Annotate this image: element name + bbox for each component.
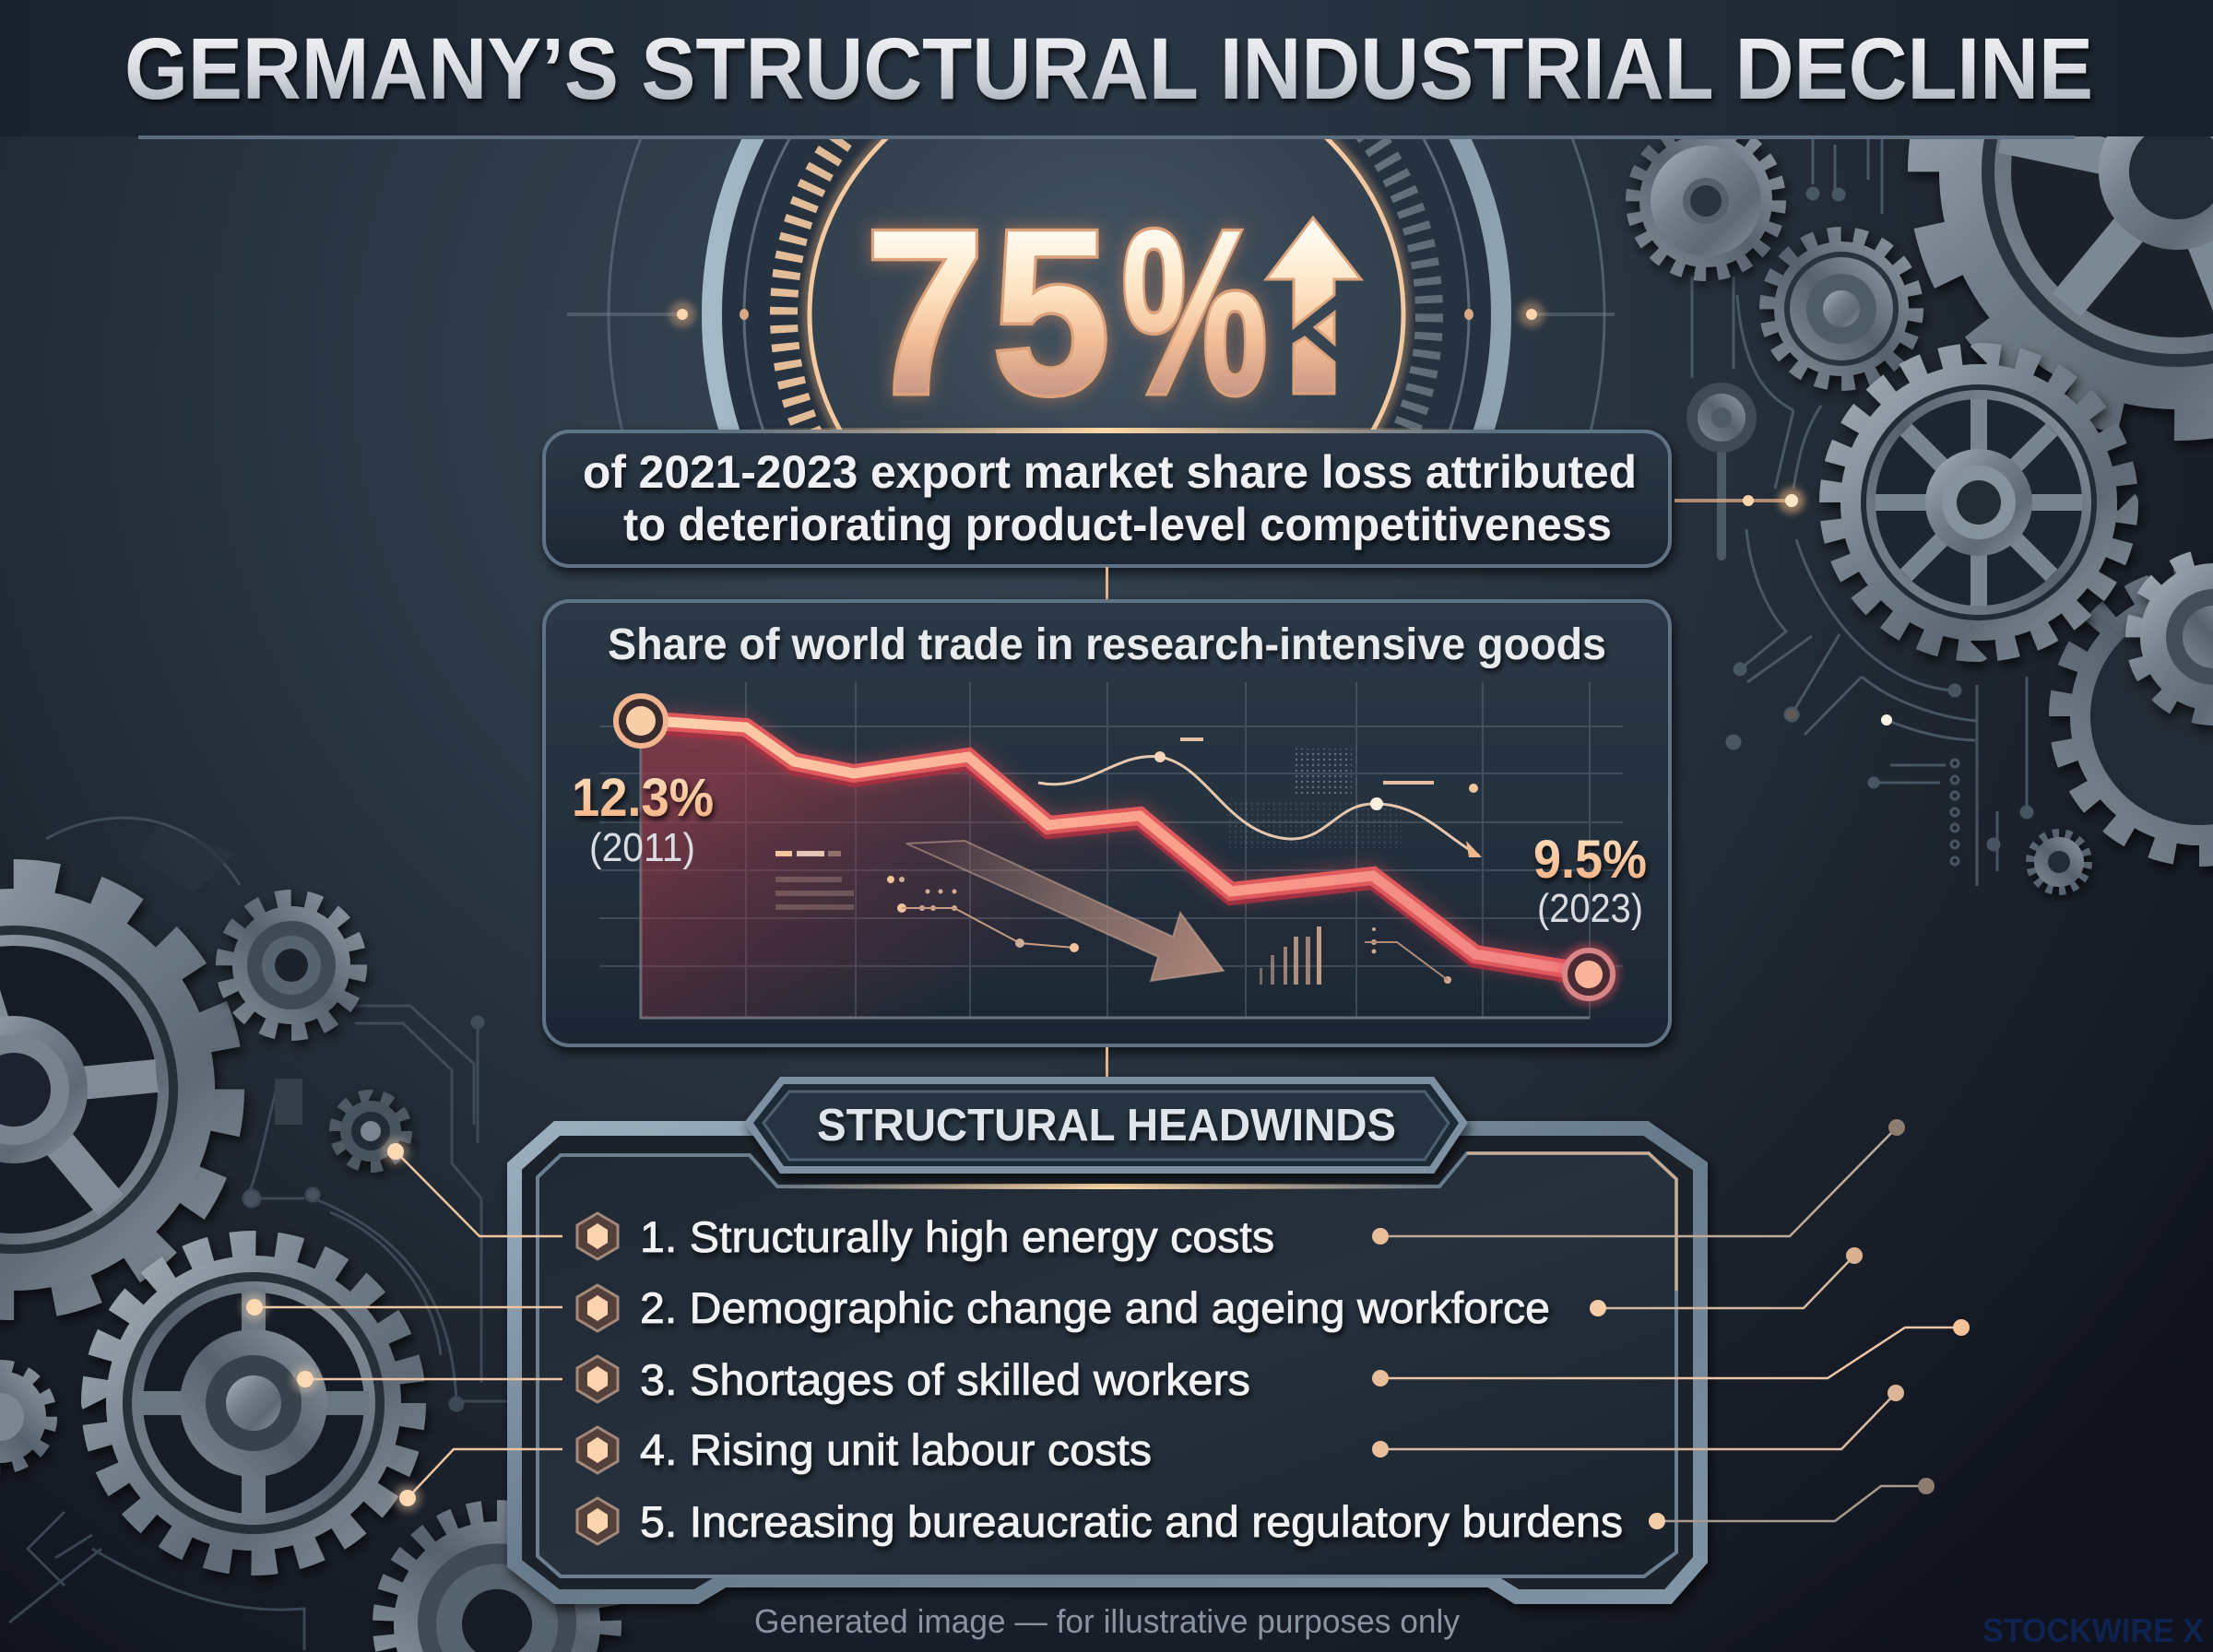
inner panel accent bbox=[1467, 1153, 1676, 1291]
panel: trade share chart bbox=[544, 601, 1670, 1045]
statistic: 75%: 7 bbox=[865, 181, 985, 442]
gear: main right bbox=[1831, 355, 2126, 650]
trend line bbox=[641, 720, 1589, 977]
connector: chart to headwinds bbox=[1106, 1047, 1108, 1080]
chart heading: Share of world trade in research-intensive goods bbox=[608, 620, 1606, 669]
item 2: 2. Demographic change and ageing workforce bbox=[640, 1283, 1550, 1332]
dial: metal ring bbox=[702, 139, 1511, 430]
label: 2023 year: (2023) bbox=[1537, 886, 1643, 931]
statistic: 75%: % bbox=[1121, 181, 1268, 442]
dial: dark ring base bbox=[722, 139, 1404, 430]
down arrow bbox=[906, 841, 1224, 981]
summary text bbox=[583, 446, 1637, 550]
gear: large top right bbox=[1926, 0, 2213, 422]
outer metal frame bbox=[515, 1128, 1700, 1597]
gear: large left bbox=[0, 876, 228, 1304]
icon: broken up arrow bbox=[1266, 218, 1361, 394]
dial: thin ring bbox=[743, 139, 1470, 430]
decoration: right circuit traces bbox=[1692, 129, 2032, 886]
statistic: 75%: 7 bbox=[865, 181, 985, 442]
dial: axis dots and lines bbox=[567, 301, 1615, 327]
panel: structural headwinds bbox=[515, 1080, 1700, 1597]
watermark: STOCKWIRE X bbox=[1982, 1611, 2204, 1649]
marker: 2023 bbox=[1557, 943, 1620, 1006]
gear: upper small right bbox=[1634, 129, 1778, 273]
statistic: 75%: 5 bbox=[992, 181, 1110, 442]
statistic: 75% bbox=[865, 181, 1268, 442]
gear: front right bbox=[2134, 557, 2213, 717]
chart grid bbox=[599, 682, 1623, 1018]
gear: tiny node right bbox=[1686, 383, 1757, 560]
gear: small upper left bbox=[225, 899, 358, 1032]
label: 2011 year: (2011) bbox=[589, 825, 695, 870]
label: 2011 value: 12.3% bbox=[572, 768, 714, 828]
glow: right connector bbox=[1675, 488, 1892, 726]
gear: middle small right bbox=[1768, 235, 1915, 383]
item 3: 3. Shortages of skilled workers bbox=[640, 1355, 1250, 1404]
label: 2023 value: 9.5% bbox=[1533, 830, 1647, 890]
dial: tick marks bbox=[770, 139, 1443, 430]
gear: tiny lower right bbox=[2030, 833, 2088, 891]
gear: bottom bbox=[385, 1512, 609, 1652]
item 5: 5. Increasing bureaucratic and regulatory burdens bbox=[640, 1497, 1623, 1546]
heading plate: STRUCTURAL HEADWINDS bbox=[817, 1101, 1396, 1150]
chart panel box bbox=[544, 601, 1670, 1045]
mini chart: curve bbox=[1038, 739, 1482, 857]
panel glow bbox=[777, 1184, 1439, 1189]
item 1: 1. Structurally high energy costs bbox=[640, 1212, 1274, 1261]
area below line bbox=[641, 720, 1589, 1018]
summary text: of 2021-2023 export market share loss attributed bbox=[583, 446, 1637, 498]
title band bbox=[0, 0, 2213, 139]
decoration: left circuit traces bbox=[9, 818, 516, 1650]
connector: summary to chart bbox=[1106, 567, 1108, 600]
dial: glow bbox=[799, 139, 1414, 430]
central dial bbox=[607, 139, 1606, 430]
connector lines: right side bbox=[1372, 1119, 1970, 1529]
chart axis bbox=[641, 747, 1590, 1018]
gear: large lower left bbox=[95, 1245, 412, 1562]
top glow bbox=[738, 428, 1475, 433]
footnote: Generated image — for illustrative purposes only bbox=[754, 1602, 1460, 1640]
connector lines: left side bbox=[241, 1138, 562, 1512]
gear: lower right back bbox=[2061, 578, 2213, 855]
inner panel bbox=[538, 1153, 1676, 1576]
panel: summary bbox=[544, 428, 1670, 566]
summary box bbox=[544, 431, 1670, 566]
dial: inner disc bbox=[808, 139, 1405, 430]
mini chart: left widgets bbox=[775, 851, 1079, 952]
gear: tiny left node bbox=[336, 1096, 406, 1166]
summary text: to deteriorating product-level competitiveness bbox=[623, 499, 1612, 550]
item 4: 4. Rising unit labour costs bbox=[640, 1425, 1152, 1474]
statistic: 75%: % bbox=[1121, 181, 1268, 442]
statistic: 75%: 5 bbox=[992, 181, 1110, 442]
gear: left edge bbox=[0, 1366, 51, 1468]
title: GERMANY’S STRUCTURAL INDUSTRIAL DECLINE bbox=[124, 20, 2093, 118]
dial: outer guide arcs bbox=[607, 139, 1606, 430]
heading plate bbox=[749, 1080, 1463, 1170]
mini chart: bars bbox=[1260, 926, 1451, 985]
marker: 2011 bbox=[616, 696, 666, 746]
